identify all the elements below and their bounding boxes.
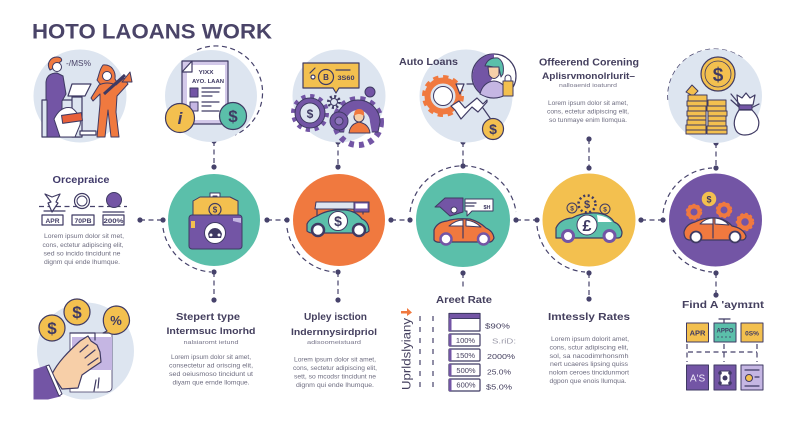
title: HOTO LAOANS WORK [32,20,272,44]
step circle: teal car with coins: £ [583,218,592,235]
text block: upley isction [291,311,377,389]
illustration: auto loan person, gear and coin: $ [489,121,497,137]
step circle: orange car with gears: $ [706,194,712,204]
rate table: 150% [456,351,475,360]
panel: find a payment: APPO [716,328,734,334]
step circle: orange car with gears [669,174,762,266]
text block: intestly rates: nolom ceroes tincidunmort [549,370,629,376]
step circle: teal car with coins: $ [570,206,574,212]
rate table: Uprldslyiany [402,318,414,390]
rate table: 600% [456,380,476,390]
text block: orcepraice with rate boxes [39,174,127,266]
rate table [401,294,516,392]
step circle: wallet: $ [213,206,218,214]
illustration: hand holding document with coins [34,299,134,400]
rate table: 25.0% [487,368,511,376]
illustration: loan document with coins: AYO. LAAN [192,79,224,85]
text block: orcepraice with rate boxes: APR [46,218,60,225]
text block: offered corening: Aplisrvmonolrlurit– [542,71,635,82]
text block: stepert type: diyam que ernde llomque. [172,380,250,386]
text block: orcepraice with rate boxes: dignm qui ende lhumque. [44,259,120,266]
step circle: teal car with coins: $ [603,206,607,214]
text block: intestly rates [548,311,630,385]
illustration: hand holding document with coins: $ [47,319,57,338]
illustration: loan document with coins: i [178,109,184,128]
text block: offered corening [539,56,639,124]
illustration: loan document with coins [165,50,257,142]
illustration: hand holding document with coins: % [110,313,122,328]
illustration: two people with laptop [34,50,132,142]
illustration: cheque and gears [292,50,386,145]
illustration: hand holding document with coins: $ [72,303,82,322]
illustration: auto loan person, gear and coin [420,50,516,142]
rate table: 100% [456,336,475,345]
step circle: orange car with speech bubble [416,173,510,267]
text block: offered corening: so tunmaye enim llomqua. [549,117,627,124]
text block: stepert type: Intermsuc lmorhd [166,326,256,337]
step circle: car with crane: $ [334,213,342,229]
text block: offered corening: cons, ectetur adipiscing elit, [547,108,629,116]
text block: upley isction: adisoomeistuard [307,340,361,346]
text block: offered corening: Offeerend Corening [539,56,639,68]
rate table: 500% [456,366,476,375]
panel: find a payment: 0S% [745,330,759,338]
illustration: coin, money stacks and bag: $ [713,65,724,86]
text block: intestly rates: nert ucaeres lipsing quiss [550,361,628,368]
rate table: $5.0% [486,382,512,392]
illustration: loan document with coins: $ [228,107,238,126]
text block: upley isction: dignm qui ende lhumque. [296,382,374,389]
text block: stepert type [166,311,256,386]
panel: find a payment [682,299,765,390]
text block: stepert type: consectetur ad oriscing elit, [169,362,253,370]
text block: orcepraice with rate boxes: Orcepraice [52,174,110,186]
text block: intestly rates: Lorem ipsum dolorit amet, [551,336,629,343]
text block: upley isction: Indernnysirdpriol [291,327,377,338]
text block: upley isction: sett, so mcodsr tincidunt ne [294,374,377,380]
text block: intestly rates: Imtessly Rates [548,311,630,323]
illustration: cheque and gears: $ [307,107,314,121]
text block: upley isction: cons, sectetur adipiscing elit, [293,365,377,372]
text block: offered corening: Lorem ipsum dolor sit amet, [548,100,628,107]
rate table: S.riD: [492,338,516,346]
panel: find a payment: Find A 'aymɪnt [682,299,765,311]
illustration: cheque and gears: 3S60 [338,75,355,82]
text block: upley isction: Lorem ipsum dolor sit amet, [294,356,376,364]
text block: stepert type: Lorem ipsum dolor sit amet, [171,354,251,361]
panel: find a payment: APR [690,328,706,338]
text block: upley isction: Upley isction [304,311,367,323]
rate table: $90% [485,322,510,330]
rate table: Areet Rate [436,294,492,306]
illustration: cheque and gears: B [323,73,329,82]
text block: intestly rates: sol, sa nacodimrhonsmh [550,353,629,360]
text block: orcepraice with rate boxes: 70PB [74,218,92,225]
step circle: teal car with coins [542,174,636,266]
text block: stepert type: nalsiaromt ietund [184,340,238,346]
text block: orcepraice with rate boxes: 200% [104,218,124,225]
panel: find a payment: A'S [690,374,705,384]
timeline connectors [137,46,745,303]
step circle: wallet [168,174,260,266]
text block: stepert type: Stepert type [176,311,240,323]
step circle: orange car with speech bubble: $H [483,205,491,211]
illustration: loan document with coins: YIXX [198,70,214,76]
illustration: coin, money stacks and bag [668,49,762,143]
text block: intestly rates: cons, sctur adipiscing elit, [550,344,629,352]
illustration: two people with laptop: -/MS% [66,59,91,68]
text block: orcepraice with rate boxes: Lorem ipsum dolor sit met, [44,233,124,240]
text block: offered corening: nalloaenid ioatunrd [559,83,617,89]
text block: orcepraice with rate boxes: sed so incido tincidunt ne [44,250,121,258]
text block: intestly rates: dgpon que enois llumqua. [550,378,627,385]
heading: auto loans: Auto Loans [399,56,458,68]
step circle: car with crane [293,174,385,266]
text block: stepert type: sed oeiusmoso tincidunt ut [169,371,253,378]
rate table: 2000% [487,352,515,361]
text block: orcepraice with rate boxes: cons, ectetur adipiscing elit, [42,242,124,249]
step circle: teal car with coins: $ [584,199,590,211]
